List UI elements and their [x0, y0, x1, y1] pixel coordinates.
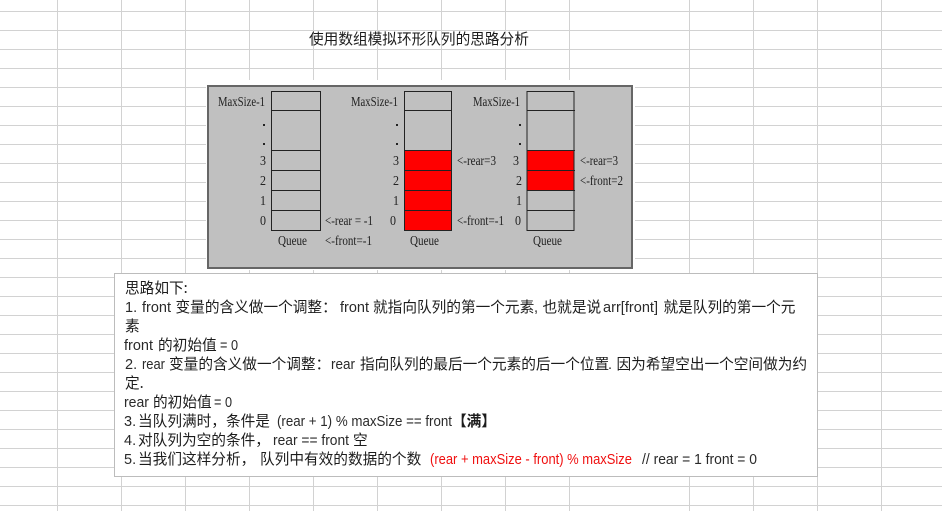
- queue column 1: empty: 2: [260, 174, 266, 189]
- note 2: 指向队列的最后一个元素的后一个位置: [360, 353, 609, 374]
- queue column 1: empty: <-front=-1: [325, 234, 372, 249]
- panel: circular queue diagram: [206, 80, 635, 270]
- queue column 1: empty: 0: [260, 214, 266, 229]
- note 2: 因为希望空出一个空间做为约: [616, 353, 807, 374]
- heading: notes intro: 思路如下:: [125, 277, 188, 298]
- queue column 3: rear=3 front=2: MaxSize-1: [473, 95, 520, 110]
- queue column 1: empty: MaxSize-1: [218, 95, 265, 110]
- note 1: front: [340, 300, 369, 316]
- queue column 3: rear=3 front=2: <-front=2: [580, 174, 623, 189]
- note 2: rear: [331, 357, 355, 373]
- queue column 1: empty: <-rear = -1: [325, 214, 373, 229]
- note 1: front: [124, 338, 153, 354]
- queue column 3: rear=3 front=2: Queue: [533, 234, 562, 249]
- note 3: 【满】: [452, 410, 496, 431]
- note 2: [124, 353, 807, 412]
- note 2: 定.: [125, 372, 144, 393]
- queue column 3: rear=3 front=2: 0: [515, 214, 521, 229]
- note 1: [124, 296, 796, 355]
- note 2: rear: [124, 395, 149, 411]
- note 3: (rear + 1) % maxSize == front: [277, 414, 452, 430]
- queue column 3: rear=3 front=2: 1: [516, 194, 522, 209]
- note 2: rear: [142, 357, 165, 373]
- note 1: 1.: [125, 300, 137, 316]
- note 1: 就指向队列的第一个元素: [373, 296, 534, 317]
- note 4: rear == front: [273, 433, 349, 449]
- note 2: .: [608, 357, 612, 373]
- note 1: 就是队列的第一个元: [664, 296, 796, 317]
- queue column 2: rear=3 front=-1: <-front=-1: [457, 214, 504, 229]
- note 1: front: [142, 300, 171, 316]
- note 5: // rear = 1 front = 0: [642, 452, 757, 468]
- queue column 1: empty: [218, 92, 373, 249]
- note 2: 的初始值: [153, 391, 212, 412]
- note 2: 变量的含义做一个调整：: [169, 353, 330, 374]
- queue column 3: rear=3 front=2: [473, 92, 623, 249]
- note 4: 4.: [124, 433, 136, 449]
- note 1: 的初始值: [158, 334, 217, 355]
- queue column 2: rear=3 front=-1: 2: [393, 174, 399, 189]
- panel: notes text box: [114, 274, 818, 476]
- title: 使用数组模拟环形队列的思路分析: [309, 28, 529, 49]
- note 1: 也就是说: [542, 296, 601, 317]
- note 1: arr[front]: [603, 300, 658, 316]
- note 1: 变量的含义做一个调整：: [176, 296, 337, 317]
- note 3: 当队列满时，条件是: [138, 410, 270, 431]
- queue column 2: rear=3 front=-1: 1: [393, 194, 399, 209]
- note 5: 队列中有效的数据的个数: [260, 448, 422, 469]
- note 5: 当我们这样分析，: [138, 448, 255, 469]
- queue column 3: rear=3 front=2: 3: [513, 154, 519, 169]
- note 2: = 0: [214, 395, 232, 411]
- note 4: 对队列为空的条件，: [138, 429, 270, 450]
- queue column 2: rear=3 front=-1: [351, 92, 504, 249]
- note 4: [124, 429, 368, 450]
- queue column 2: rear=3 front=-1: MaxSize-1: [351, 95, 398, 110]
- note 1: 素: [125, 315, 140, 336]
- note 1: = 0: [220, 338, 238, 354]
- note 2: 2.: [125, 357, 137, 373]
- queue column 2: rear=3 front=-1: 3: [393, 154, 399, 169]
- queue column 2: rear=3 front=-1: Queue: [410, 234, 439, 249]
- note 3: [124, 410, 496, 431]
- note 5: [124, 448, 757, 469]
- note 3: 3.: [124, 414, 136, 430]
- note 4: 空: [353, 429, 368, 450]
- queue column 2: rear=3 front=-1: <-rear=3: [457, 154, 496, 169]
- queue column 3: rear=3 front=2: 2: [516, 174, 522, 189]
- note 1: ,: [534, 300, 538, 316]
- queue column 3: rear=3 front=2: <-rear=3: [580, 154, 618, 169]
- note 5: (rear + maxSize - front) % maxSize: [430, 452, 632, 468]
- queue column 1: empty: 3: [260, 154, 266, 169]
- note 5: 5.: [124, 452, 136, 468]
- queue column 1: empty: 1: [260, 194, 266, 209]
- queue column 1: empty: Queue: [278, 234, 307, 249]
- queue column 2: rear=3 front=-1: 0: [390, 214, 396, 229]
